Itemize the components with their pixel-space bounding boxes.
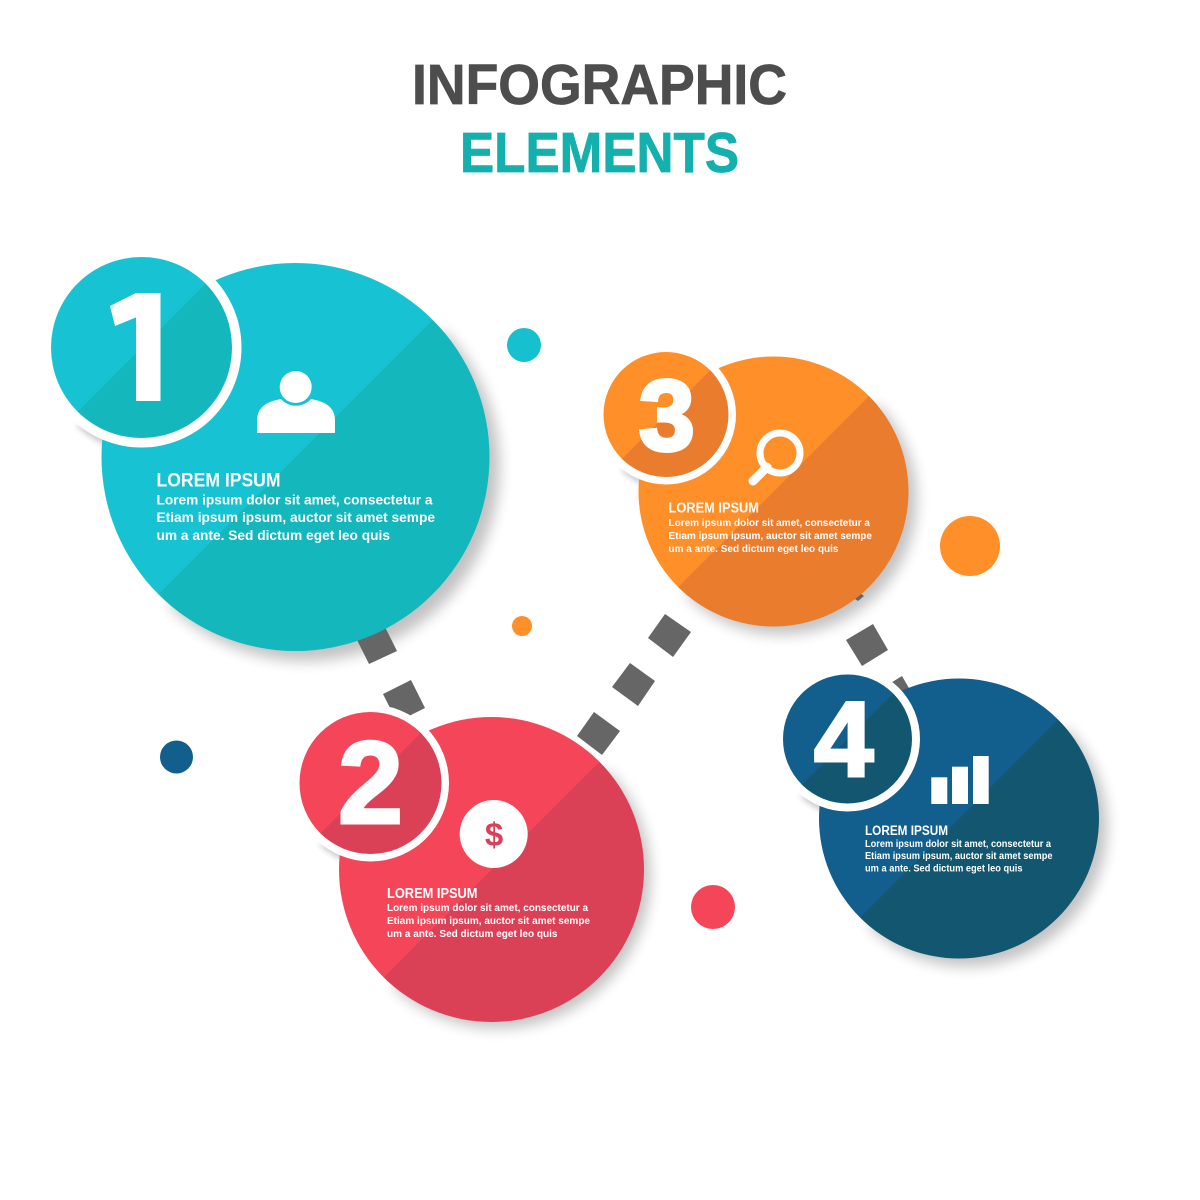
badge shadows <box>75 424 902 866</box>
icon: dollar coin: $ <box>485 816 503 853</box>
text block: step 1: LOREM IPSUM <box>156 470 280 492</box>
panel: step 4 <box>775 666 1099 958</box>
circle: step 4 body <box>819 678 1099 958</box>
badge: number 2: 2 <box>338 717 403 848</box>
text block: step 3 <box>668 500 872 555</box>
title <box>412 53 787 185</box>
text block: step 3: Etiam ipsum ipsum, auctor sit amet sempe <box>668 530 872 542</box>
text block: step 4: Lorem ipsum dolor sit amet, consectetur a <box>865 839 1052 850</box>
panel: step 1 <box>42 248 490 651</box>
panel: step 2 <box>292 704 644 1022</box>
decorative dot: small orange <box>512 616 532 636</box>
icon: person <box>257 371 335 433</box>
text block: step 3: LOREM IPSUM <box>668 500 759 516</box>
dashed connector: step 1 to step 2 <box>355 623 425 722</box>
text block: step 2: um a ante. Sed dictum eget leo quis <box>387 928 558 940</box>
text block: step 1: um a ante. Sed dictum eget leo quis <box>156 527 390 543</box>
icon: magnifier <box>753 433 800 481</box>
circle: step 1 body <box>102 263 490 651</box>
dashed connector: step 3 to step 4 <box>846 590 917 718</box>
badge: number 1 <box>42 248 242 448</box>
text block: step 4: um a ante. Sed dictum eget leo quis <box>865 864 1023 874</box>
panel shadows <box>168 330 1107 1028</box>
badge: number 4 <box>775 666 920 812</box>
text block: step 3: Lorem ipsum dolor sit amet, consectetur a <box>668 517 870 529</box>
badge: number 2 <box>292 704 449 862</box>
badge: number 3 <box>596 344 736 484</box>
title line: infographic: INFOGRAPHIC <box>412 53 787 117</box>
dashed connector: step 2 to step 3 <box>577 614 691 755</box>
decorative dot: teal <box>507 328 541 362</box>
panel: step 3 <box>596 344 908 626</box>
text block: step 1: Lorem ipsum dolor sit amet, consectetur a <box>156 492 433 508</box>
text block: step 2 <box>387 886 590 940</box>
text block: step 2: Etiam ipsum ipsum, auctor sit amet sempe <box>387 915 590 927</box>
badge: number 4: 4 <box>814 679 874 799</box>
decorative dot: red <box>691 885 735 929</box>
icon: dollar coin <box>460 800 528 868</box>
text block: step 1: Etiam ipsum ipsum, auctor sit amet sempe <box>156 509 435 525</box>
circle: step 2 body <box>339 717 644 1022</box>
text block: step 3: um a ante. Sed dictum eget leo quis <box>668 543 839 555</box>
decorative dot: blue <box>160 740 193 774</box>
circle: step 3 body <box>638 356 908 626</box>
text block: step 2: Lorem ipsum dolor sit amet, consectetur a <box>387 902 588 914</box>
text block: step 2: LOREM IPSUM <box>387 886 478 902</box>
text block: step 4: Etiam ipsum ipsum, auctor sit amet sempe <box>865 851 1053 862</box>
badge: number 1: 1 <box>106 262 190 431</box>
title line: elements: ELEMENTS <box>460 121 739 185</box>
decorative dot: large orange <box>940 516 1000 576</box>
text block: step 4: LOREM IPSUM <box>865 823 948 838</box>
badge: number 3: 3 <box>639 360 695 472</box>
icon: bar chart <box>931 756 989 804</box>
text block: step 4 <box>865 823 1053 874</box>
text block: step 1 <box>156 470 435 543</box>
